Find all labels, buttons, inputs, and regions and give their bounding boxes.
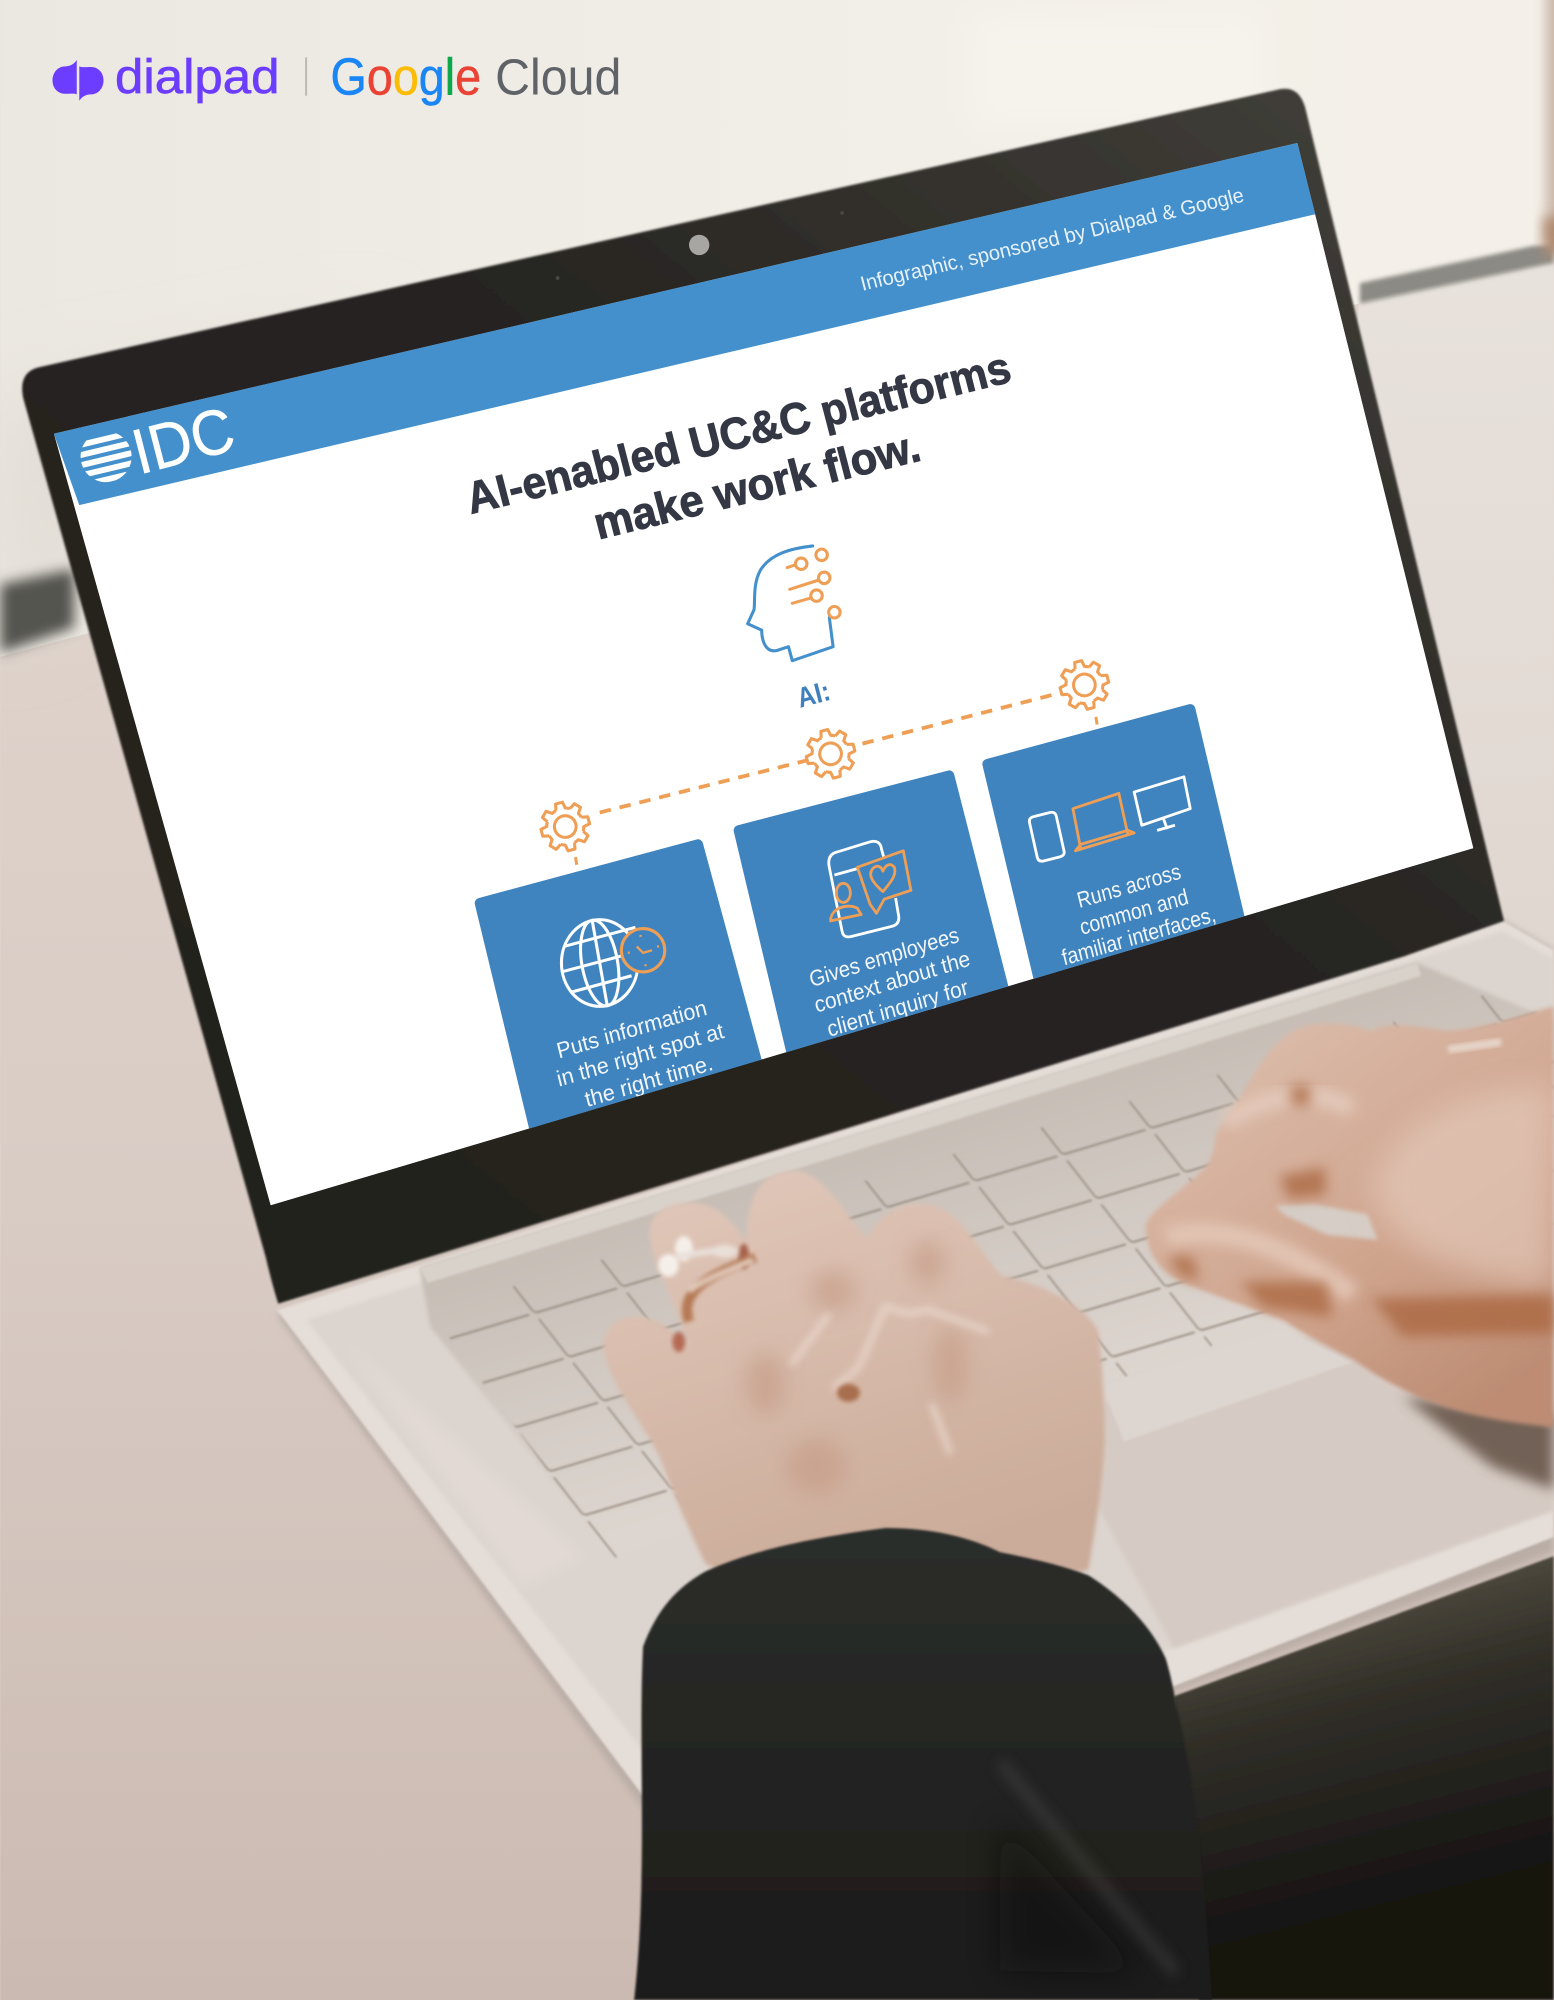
header caption: Infographic, sponsored by Dialpad & Google [858,185,1246,296]
gear 3 [1058,659,1110,711]
right hand ring [1448,1038,1502,1053]
IDC logo: IDC [125,393,242,488]
icon: globe with clock [561,917,665,1009]
hand: right [1146,1006,1554,1427]
ring [658,1236,755,1321]
panel: card 2 [739,776,1005,1061]
gear 2 [804,728,856,780]
panel: card 3 [987,709,1241,989]
card 2 text: client inquiry for [824,974,971,1042]
knuckle shading [745,1240,968,1495]
logo: Google Cloud [331,48,621,106]
finger gaps [672,1332,685,1352]
logo: dialpad: dialpad [115,50,280,104]
laptop lid bezel [22,89,1504,1304]
title: make work flow. [589,422,925,549]
screen background [54,143,1473,1205]
logo: Google Cloud: Cloud [495,48,621,105]
icon: AI head [748,546,840,661]
icon: devices [1029,777,1190,861]
laptop deck and keyboard [277,921,1554,1809]
title: AI-enabled UC&C platforms [461,343,1016,524]
card 1 text: Puts information [554,995,709,1064]
card 2 text [807,922,973,1042]
trackpad [1097,1314,1554,1648]
card 3 text: common and [1077,884,1191,940]
card 1 text: in the right spot at [554,1018,727,1092]
panel: card 1 [480,844,758,1135]
sleeve fold [1000,1820,1142,1973]
icon: phone with chat bubble [829,841,911,937]
card 3 text: familiar interfaces, [1059,902,1218,970]
dashed connector [575,693,1097,865]
hinge bar [420,963,1421,1283]
finger shadows [1167,1085,1554,1337]
card 1 text: the right time. [582,1050,715,1112]
card 2 text: context about the [812,946,973,1018]
gear 1 [539,800,592,852]
logo: Google Cloud: Google [331,48,481,106]
card 2 text: Gives employees [807,922,961,992]
veins [791,1306,989,1454]
logo: dialpad [53,50,280,104]
hand: left [603,1171,1105,1594]
webcam [556,211,844,280]
sleeve [634,1528,1212,2000]
IDC logo [80,410,234,482]
laptop screen [54,143,1473,1205]
AI label: AI: [794,675,833,714]
card 3 text [1059,859,1218,970]
blue header band [54,143,1315,505]
dark clothing at right [1174,1556,1554,2000]
logo divider [305,57,307,96]
card 3 text: Runs across [1074,859,1183,913]
card 1 text [554,995,727,1112]
